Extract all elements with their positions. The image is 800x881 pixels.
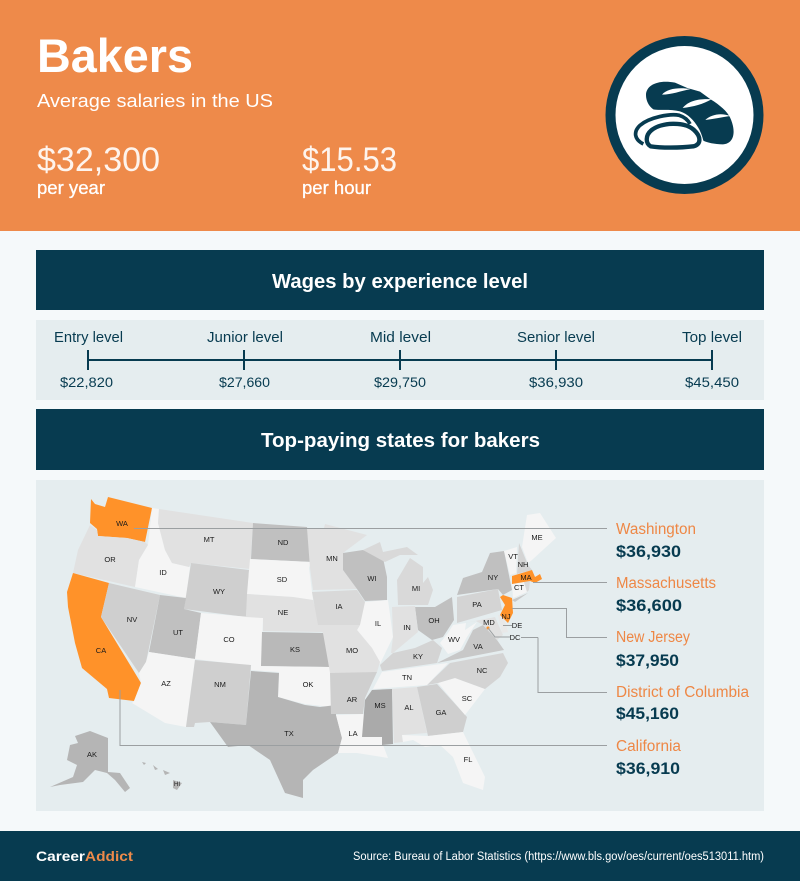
state: Idaho: ID	[159, 568, 167, 577]
state: California	[67, 573, 141, 701]
state: Montana: MT	[204, 535, 215, 544]
state: Maine	[522, 513, 556, 563]
state: Wisconsin: WI	[367, 574, 377, 583]
yearly salary: $32,300	[37, 141, 160, 179]
legend: Washington: Washington	[616, 521, 696, 538]
state: Minnesota: MN	[326, 554, 338, 563]
state: Indiana: IN	[403, 623, 411, 632]
yearly salary	[37, 141, 160, 198]
state: Kentucky	[380, 640, 442, 671]
state: Texas: TX	[284, 729, 294, 738]
state: Rhode Island	[524, 581, 530, 592]
heading bar: wages by experience level	[36, 250, 764, 310]
state: South Carolina	[438, 678, 485, 715]
state: North Carolina	[427, 653, 508, 689]
state: Mississippi: MS	[374, 701, 386, 710]
state: Nebraska	[246, 594, 323, 632]
legend: District of Columbia: District of Columbia	[616, 684, 749, 701]
state: Oklahoma: OK	[303, 680, 313, 689]
panel: experience timeline	[36, 320, 764, 400]
state: Mississippi	[362, 689, 393, 745]
state: Alabama: AL	[404, 703, 414, 712]
top level: $45,450	[685, 374, 739, 390]
mid level: Mid level	[370, 329, 431, 346]
state: Arkansas	[330, 672, 377, 714]
state: Maine: ME	[531, 533, 543, 542]
state: Oregon: OR	[104, 555, 116, 564]
state: Arizona: AZ	[161, 679, 171, 688]
connector: New Jersey	[512, 608, 607, 638]
state: Wisconsin	[343, 550, 387, 601]
senior level: Senior level	[517, 329, 595, 346]
state: South Carolina: SC	[462, 694, 473, 703]
state: Minnesota	[307, 524, 367, 590]
legend: California: California	[616, 738, 681, 755]
header panel	[0, 0, 800, 231]
state: California: CA	[96, 646, 106, 655]
state: Florida: FL	[464, 755, 472, 764]
state: Colorado	[195, 613, 263, 667]
label: District of Columbia	[488, 628, 538, 642]
state: New Hampshire	[517, 543, 532, 574]
yearly salary: per year	[37, 178, 105, 198]
heading bar: wages by experience level: Wages by experience level	[272, 271, 528, 293]
heading bar: top-paying states	[36, 409, 764, 470]
title: Bakers	[37, 29, 193, 82]
state: Illinois: IL	[375, 619, 381, 628]
state: Ohio: OH	[428, 616, 440, 625]
legend: California: $36,910	[616, 759, 680, 778]
legend: District of Columbia: $45,160	[616, 704, 679, 723]
state: Vermont: VT	[508, 552, 518, 561]
hourly salary: $15.53	[302, 141, 397, 179]
state: Tennessee	[373, 663, 448, 689]
state: Wyoming: WY	[213, 587, 225, 596]
state: New York: NY	[488, 573, 498, 582]
legend: New Jersey: $37,950	[616, 651, 679, 670]
state: Idaho	[135, 508, 190, 598]
state: Louisiana	[336, 714, 388, 758]
entry level: $22,820	[60, 374, 113, 390]
state: West Virginia	[440, 622, 477, 654]
state: Connecticut: CT	[514, 583, 524, 592]
state: Delaware	[498, 615, 508, 633]
state: Washington: WA	[116, 519, 128, 528]
state: Iowa: IA	[335, 602, 343, 611]
legend: Massachusetts	[616, 575, 716, 615]
state: Michigan	[363, 542, 433, 605]
senior level	[517, 329, 595, 390]
state: New Jersey	[500, 595, 513, 623]
state: Nebraska: NE	[278, 608, 288, 617]
legend: New Jersey: New Jersey	[616, 629, 690, 646]
subtitle: Average salaries in the US	[37, 91, 273, 111]
state: North Dakota: ND	[278, 538, 289, 547]
state: Indiana	[391, 606, 418, 653]
state: Arizona	[132, 652, 195, 727]
state: Maryland	[465, 617, 503, 640]
state: Colorado: CO	[223, 635, 235, 644]
state: Arkansas: AR	[347, 695, 358, 704]
timeline axis	[88, 350, 712, 370]
logo: CareerAddict: Career Addict	[36, 848, 133, 864]
state: Montana	[158, 509, 253, 569]
legend: New Jersey	[616, 629, 690, 670]
state: Nevada	[101, 583, 160, 673]
source: Source: Bureau of Labor Statistics (https://www.bls.gov/oes/current/oes513011.htm)	[353, 851, 764, 863]
state: Louisiana: LA	[348, 729, 358, 738]
state: Massachusetts: MA	[520, 573, 532, 582]
state: Illinois	[357, 600, 393, 664]
senior level: $36,930	[529, 374, 583, 390]
mid level	[370, 329, 431, 390]
state: Alabama	[392, 687, 427, 743]
hourly salary	[302, 141, 397, 198]
state: Ohio	[415, 597, 454, 640]
entry level: Entry level	[54, 329, 123, 346]
footer	[0, 831, 800, 881]
state: South Dakota: SD	[277, 575, 288, 584]
state: Oregon	[73, 525, 148, 587]
connector: District of Columbia	[538, 638, 607, 692]
state: Iowa	[312, 590, 367, 625]
state: Hawaii: HI	[174, 782, 180, 788]
panel: map of top-paying states	[36, 480, 764, 811]
top level	[682, 329, 742, 390]
state: Virginia	[437, 625, 504, 663]
icon: bread in circle	[610, 41, 758, 189]
state: Tennessee: TN	[402, 673, 412, 682]
entry level	[54, 329, 123, 390]
state: Connecticut	[512, 582, 527, 598]
state: Utah: UT	[173, 628, 183, 637]
state: New Hampshire: NH	[518, 560, 528, 569]
state: Missouri	[318, 625, 380, 673]
state: Alaska	[50, 731, 130, 792]
us map	[50, 497, 556, 798]
connector: Massachusetts	[533, 582, 607, 584]
legend: California	[616, 738, 681, 778]
legend: Massachusetts: Massachusetts	[616, 575, 716, 592]
state: Wyoming	[184, 563, 249, 617]
connector: California	[120, 690, 607, 746]
state: Pennsylvania	[457, 589, 502, 623]
state: Hawaii	[142, 762, 182, 790]
state: Kentucky: KY	[413, 652, 423, 661]
state: Long Island	[512, 593, 528, 602]
state: Kansas	[261, 632, 329, 667]
junior level: $27,660	[219, 374, 270, 390]
state: Missouri: MO	[346, 646, 358, 655]
junior level: Junior level	[207, 329, 283, 346]
label: District of Columbia: DC	[510, 633, 521, 642]
legend: Massachusetts: $36,600	[616, 596, 682, 615]
state: Oklahoma	[251, 666, 331, 707]
connector: Washington	[134, 528, 607, 530]
state: Massachusetts	[512, 570, 542, 584]
junior level	[207, 329, 283, 390]
state: New York	[457, 551, 512, 595]
state: South Dakota	[247, 559, 313, 600]
state: Michigan: MI	[412, 584, 420, 593]
top level: Top level	[682, 329, 742, 346]
legend: Washington: $36,930	[616, 542, 681, 561]
state: New Mexico	[186, 660, 251, 727]
hourly salary: per hour	[302, 178, 371, 198]
state: Utah	[149, 595, 201, 659]
state: Georgia: GA	[436, 708, 446, 717]
state: New Jersey: NJ	[501, 612, 511, 621]
mid level: $29,750	[374, 374, 426, 390]
state: Georgia	[417, 684, 467, 736]
state: North Dakota	[251, 523, 312, 562]
state: Texas	[210, 671, 342, 798]
state: Florida	[402, 732, 485, 790]
state: Pennsylvania: PA	[472, 600, 482, 609]
state: West Virginia: WV	[448, 635, 460, 644]
state: North Carolina: NC	[477, 666, 488, 675]
state: Alaska: AK	[87, 750, 97, 759]
legend: Washington	[616, 521, 696, 561]
state: Nevada: NV	[127, 615, 137, 624]
state: District of Columbia	[486, 626, 490, 630]
label: Delaware	[503, 621, 522, 630]
label: Delaware: DE	[512, 621, 522, 630]
state: Vermont	[504, 547, 518, 575]
legend: District of Columbia	[616, 684, 749, 723]
state: Kansas: KS	[290, 645, 300, 654]
heading bar: top-paying states: Top-paying states for bakers	[261, 430, 540, 452]
state: Virginia: VA	[473, 642, 483, 651]
state: Maryland: MD	[483, 618, 495, 627]
state: Washington	[90, 497, 152, 542]
state: New Mexico: NM	[214, 680, 226, 689]
